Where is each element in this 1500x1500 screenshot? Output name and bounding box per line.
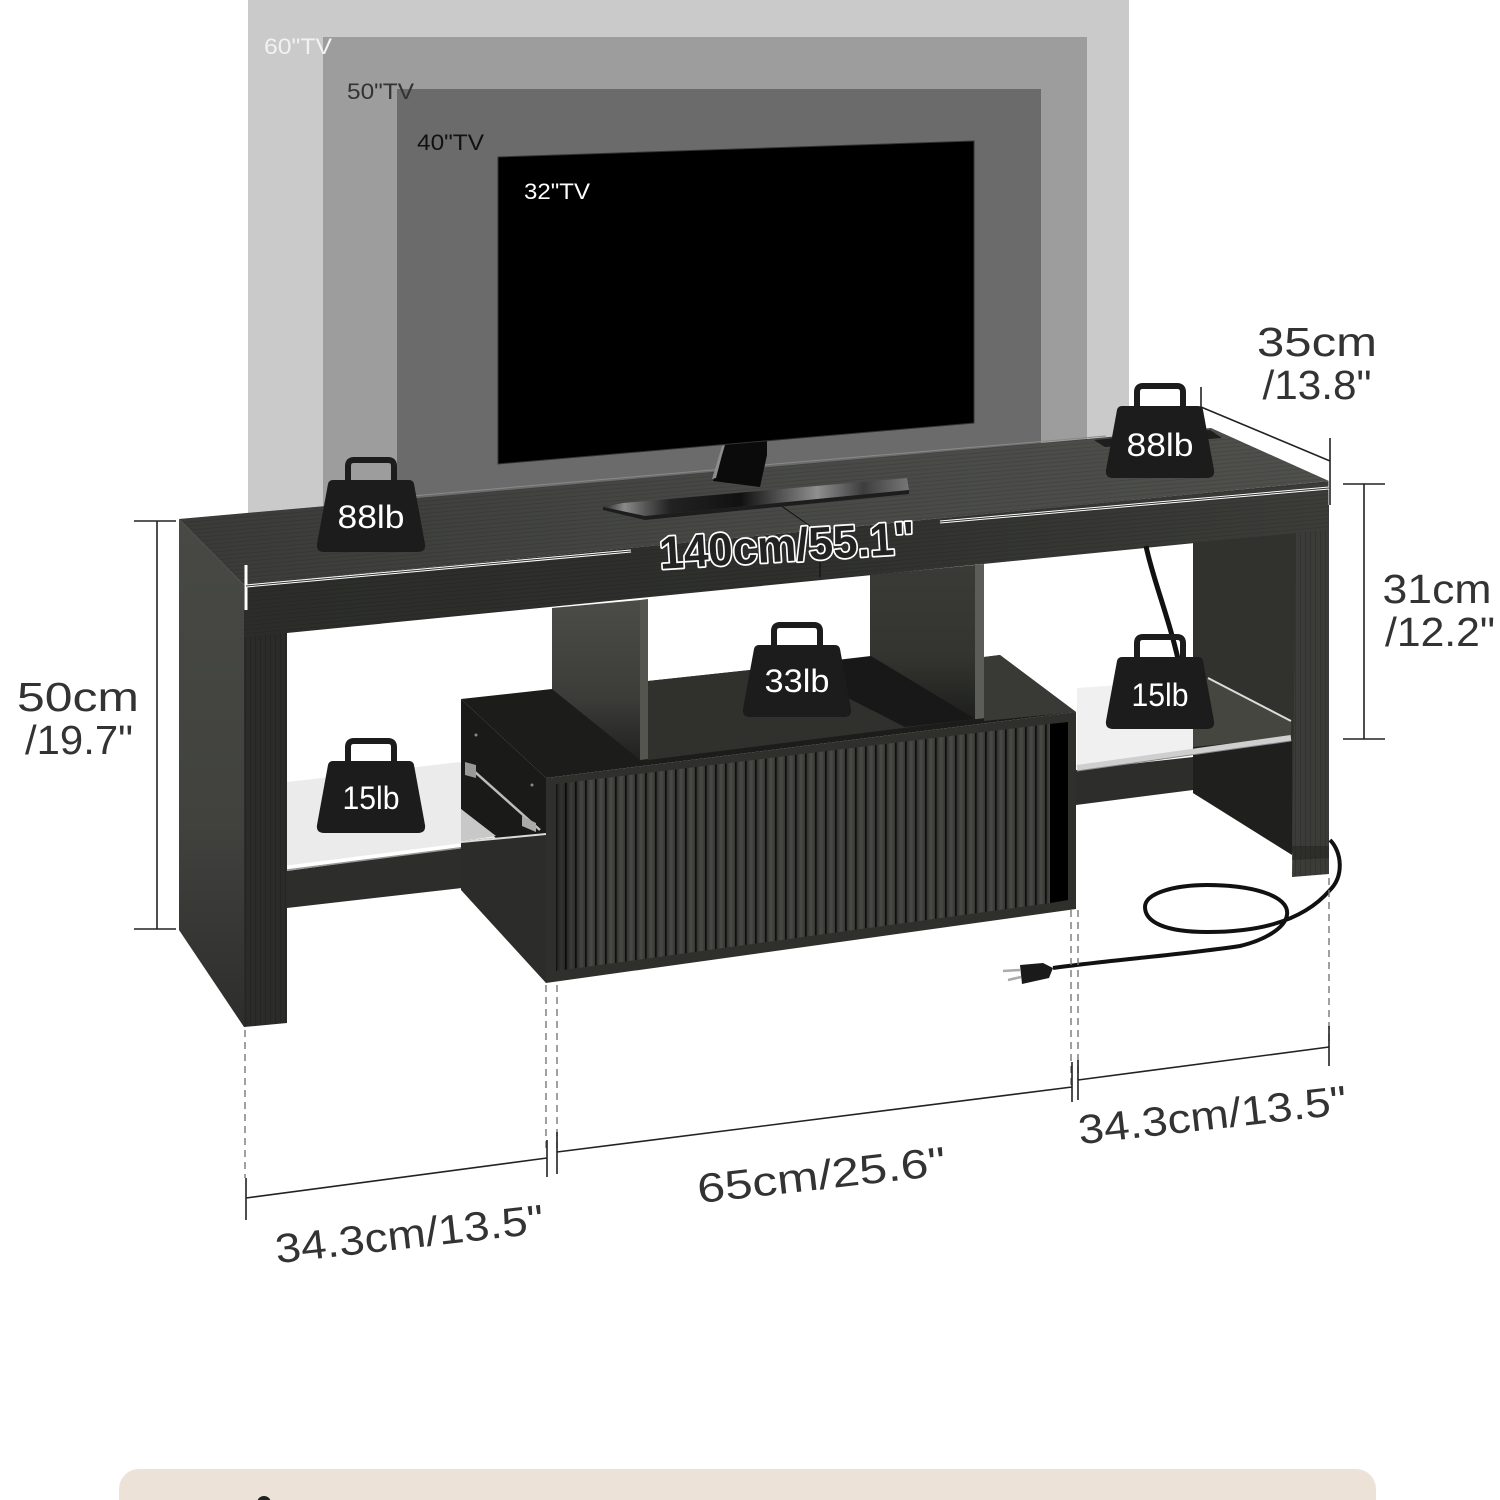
tv size backdrops (248, 0, 1129, 520)
drawer box left side (461, 699, 546, 983)
weight icon: 88lb left (317, 460, 425, 552)
drawer box top (461, 655, 1076, 778)
40 inch tv backdrop (397, 89, 1041, 509)
clearance dimension right (1343, 484, 1495, 739)
tv console (179, 428, 1329, 1027)
right leg front (1292, 522, 1329, 877)
right leg inner face (1193, 530, 1296, 855)
left span label: 34.3cm/13.5" (273, 1196, 546, 1272)
tv stand (603, 436, 909, 520)
left side face (179, 519, 244, 1027)
depth dimension (1201, 319, 1377, 505)
tv screen (498, 141, 974, 464)
drawer box front (546, 712, 1076, 983)
power cord rear (1146, 546, 1180, 668)
left center column (552, 600, 640, 762)
bottom dimensions (245, 878, 1349, 1272)
television (498, 141, 974, 520)
40 inch label: 40"TV (417, 130, 484, 155)
weight icon: 33lb center (743, 625, 851, 717)
cable grommet (1094, 430, 1222, 447)
middle span label: 65cm/25.6" (695, 1138, 948, 1212)
clearance label: /12.2" (1385, 609, 1495, 655)
fluted sliding doors (555, 720, 1050, 975)
50 inch label: 50"TV (347, 79, 414, 104)
height label: /19.7" (25, 717, 133, 763)
depth label: 35cm (1257, 319, 1377, 365)
weight icon: 15lb right (1106, 637, 1214, 729)
power cord with plug (1003, 840, 1340, 984)
50 inch tv backdrop (323, 37, 1087, 517)
dark door recess (1050, 722, 1068, 903)
height dimension left (17, 521, 176, 929)
weight icon: 88lb left: 88lb (338, 499, 404, 535)
right leg lower inner shadow (1193, 738, 1292, 855)
60 inch label: 60"TV (264, 34, 332, 59)
weight icon: 15lb right: 15lb (1132, 677, 1188, 713)
weight icon: 33lb center: 33lb (764, 663, 830, 699)
height label: 50cm (17, 674, 139, 720)
bottom beige panel (119, 1469, 1376, 1500)
column shadow on shelf (785, 656, 975, 727)
weight icon: 88lb right (1106, 386, 1214, 478)
weight icon: 15lb left (317, 741, 425, 833)
front apron (244, 481, 1329, 637)
left rear shelf slat (287, 847, 462, 908)
right span label: 34.3cm/13.5" (1076, 1077, 1349, 1153)
weight icon: 88lb right: 88lb (1126, 427, 1194, 463)
32 inch label: 32"TV (524, 179, 590, 204)
left glass shelf (287, 762, 545, 870)
shelf right of column (984, 655, 1076, 721)
width measure 140cm (246, 438, 1330, 610)
60 inch tv backdrop (248, 0, 1129, 520)
right glass shelf (1077, 678, 1291, 771)
width label: 140cm/55.1" (658, 511, 916, 579)
table top surface (179, 428, 1329, 585)
clearance label: 31cm (1382, 566, 1492, 612)
right center column (870, 565, 975, 720)
middle shelf back surface (648, 657, 975, 760)
right rear shelf slat (1076, 757, 1193, 805)
weight icon: 15lb left: 15lb (342, 780, 400, 816)
depth label: /13.8" (1262, 362, 1372, 408)
left leg front (244, 626, 287, 1027)
